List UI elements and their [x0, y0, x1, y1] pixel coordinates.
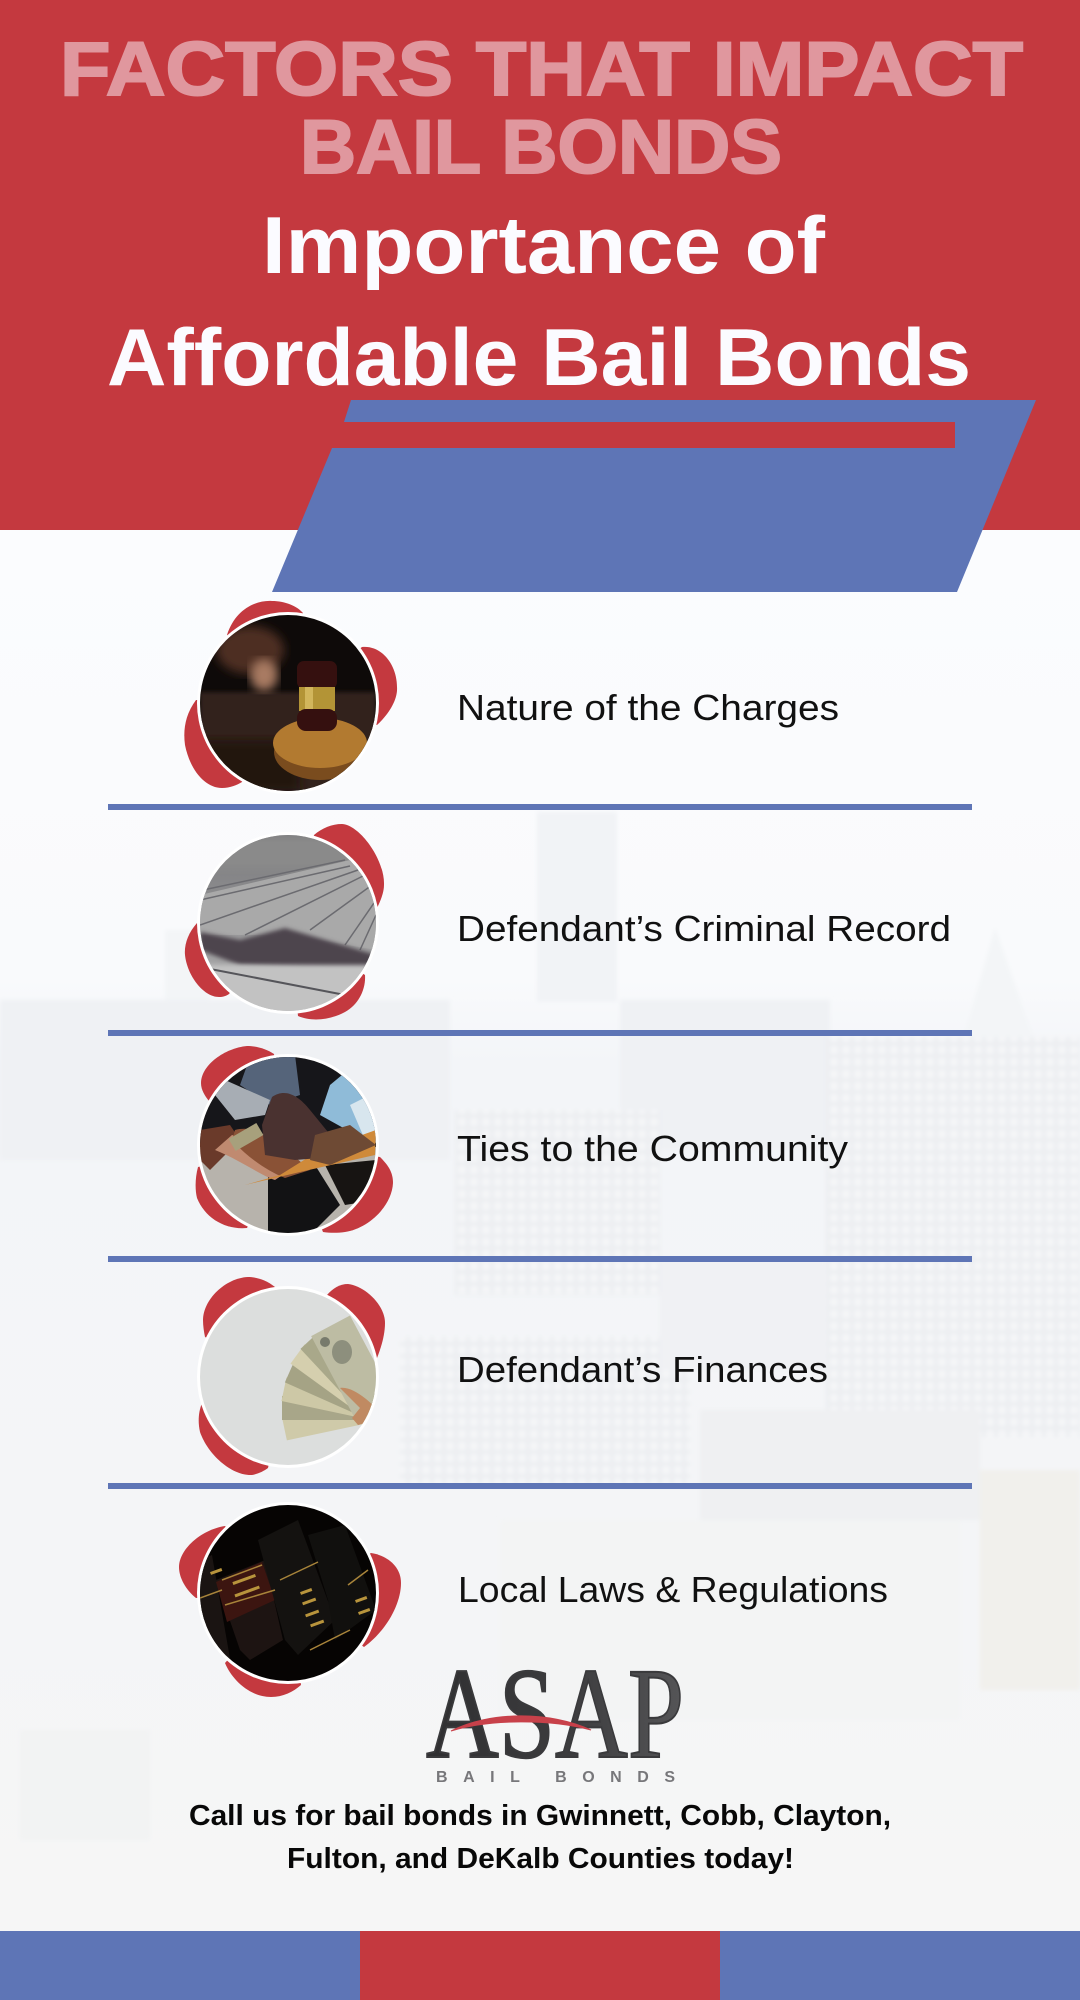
- logo: asap bail bonds: ASAP: [426, 1642, 684, 1786]
- title: factors that impact bail bonds: [60, 27, 1023, 190]
- icon: red blobs behind gavel photo: [184, 601, 397, 788]
- call to action: [189, 1800, 891, 1875]
- background: faded city skyline: [0, 530, 1080, 1931]
- icon: red blobs behind money photo: [199, 1277, 385, 1475]
- footer color bar: [0, 1931, 1080, 2000]
- header band: [0, 0, 1080, 530]
- photo: fan of dollar bills: [197, 1286, 394, 1468]
- subtitle: importance of affordable bail bonds: [107, 201, 971, 403]
- photo: gavel: [197, 612, 379, 794]
- icon: red blobs behind hands photo: [196, 1046, 393, 1233]
- factor 3: ties to the community: [196, 1046, 848, 1236]
- icon: red blobs behind law books photo: [179, 1526, 401, 1697]
- factor 4: defendant's finances: [197, 1277, 828, 1475]
- title: factors that impact bail bonds: FACTORS THAT IMPACT: [60, 27, 1023, 112]
- subtitle: importance of affordable bail bonds: Importance of: [262, 201, 826, 291]
- factor 1: nature of the charges: [184, 601, 839, 794]
- subtitle: importance of affordable bail bonds: Affordable Bail Bonds: [107, 313, 971, 403]
- photo: law books: [197, 1502, 379, 1684]
- label: Defendant’s Finances: [457, 1349, 828, 1390]
- label: Local Laws & Regulations: [458, 1569, 888, 1610]
- icon: red blobs behind papers photo: [185, 824, 384, 1019]
- factor 5: local laws and regulations: [179, 1502, 888, 1697]
- factor 2: defendant's criminal record: [185, 824, 951, 1019]
- label: Nature of the Charges: [457, 687, 839, 728]
- label: Ties to the Community: [457, 1128, 848, 1169]
- title: factors that impact bail bonds: BAIL BONDS: [300, 105, 782, 190]
- photo: stack of papers: [197, 832, 379, 1015]
- call to action: Call us for bail bonds in Gwinnett, Cobb, Clayton,: [189, 1800, 891, 1832]
- label: Defendant’s Criminal Record: [457, 908, 951, 949]
- logo swoosh: [451, 1716, 591, 1731]
- logo: asap bail bonds: BAIL BONDS: [436, 1769, 675, 1786]
- call to action: Fulton, and DeKalb Counties today!: [287, 1843, 794, 1875]
- decorative blue parallelogram banner: [272, 400, 1036, 592]
- photo: stacked hands: [197, 1054, 385, 1236]
- divider lines: [108, 804, 972, 1489]
